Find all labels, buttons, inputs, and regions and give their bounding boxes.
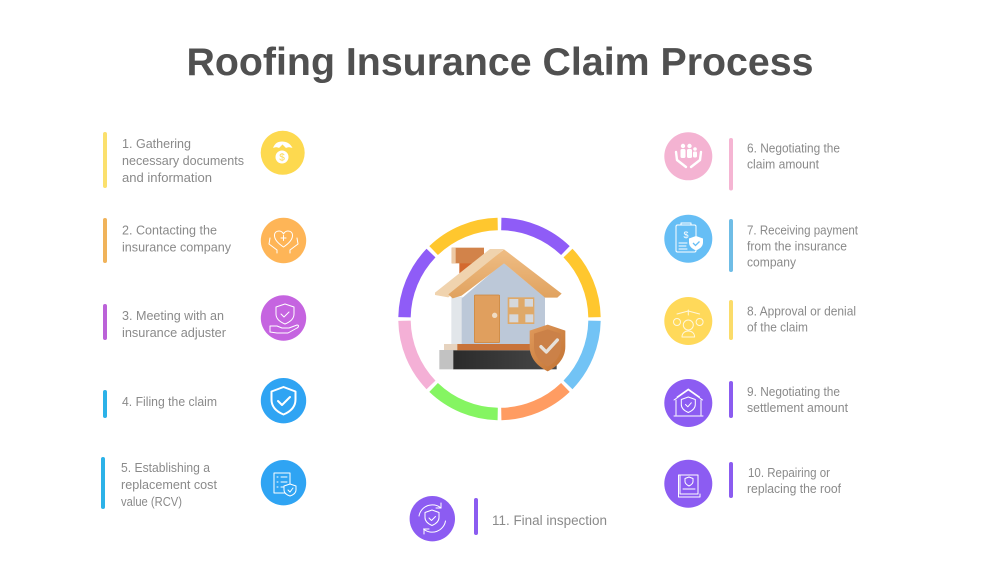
text: and information bbox=[122, 170, 212, 185]
step 1 bbox=[103, 131, 305, 188]
bar bbox=[103, 390, 107, 418]
icon: shield on hand bbox=[261, 295, 306, 341]
bar bbox=[729, 462, 733, 498]
step 11 bbox=[410, 496, 607, 541]
icon: house with shield bbox=[435, 248, 565, 371]
step 2 bbox=[103, 218, 306, 263]
text: 10. Repairing or bbox=[748, 465, 831, 480]
icon: money: $ bbox=[279, 152, 285, 164]
text bbox=[747, 222, 858, 270]
step 4 bbox=[103, 378, 306, 423]
icon: hands with heart bbox=[261, 218, 306, 263]
step 6 bbox=[664, 132, 840, 190]
text bbox=[122, 308, 227, 340]
bar bbox=[101, 457, 105, 509]
text: from the insurance bbox=[747, 238, 847, 254]
icon: shield check bbox=[261, 378, 306, 423]
text: necessary documents bbox=[122, 153, 244, 168]
bar bbox=[729, 219, 733, 272]
text bbox=[747, 384, 848, 415]
step 7 bbox=[664, 215, 858, 272]
text: 2. Contacting the bbox=[122, 222, 217, 238]
text: 9. Negotiating the bbox=[747, 384, 840, 399]
icon: policy document bbox=[664, 460, 712, 508]
step 10 bbox=[664, 460, 841, 508]
text: 7. Receiving payment bbox=[747, 222, 858, 238]
text: 4. Filing the claim bbox=[122, 394, 217, 409]
text: 5. Establishing a bbox=[121, 460, 211, 475]
bar bbox=[729, 138, 733, 190]
text bbox=[747, 304, 856, 334]
text: 6. Negotiating the bbox=[747, 140, 840, 156]
step 8 bbox=[664, 297, 856, 345]
text: insurance company bbox=[122, 240, 231, 254]
icon: shield with refresh arrows bbox=[410, 496, 455, 541]
bar bbox=[729, 381, 733, 418]
text: value (RCV) bbox=[121, 494, 182, 509]
text bbox=[122, 222, 231, 254]
bar bbox=[103, 304, 107, 340]
text bbox=[747, 465, 841, 496]
text: insurance adjuster bbox=[122, 325, 227, 340]
icon: house with shield bbox=[664, 379, 712, 427]
icon: scales with person bbox=[664, 297, 712, 345]
text bbox=[121, 460, 217, 509]
icon: money bbox=[261, 131, 305, 175]
icon: hands with family bbox=[664, 132, 712, 180]
text: 3. Meeting with an bbox=[122, 308, 224, 323]
text: 8. Approval or denial bbox=[747, 304, 856, 318]
text: 1. Gathering bbox=[122, 136, 191, 151]
icon: clipboard with shield bbox=[664, 215, 712, 263]
text bbox=[122, 136, 244, 185]
text: settlement amount bbox=[747, 400, 848, 415]
bar bbox=[103, 132, 107, 188]
text: replacing the roof bbox=[747, 481, 841, 496]
text: of the claim bbox=[747, 320, 808, 334]
icon: checklist with shield bbox=[261, 460, 306, 505]
text: replacement cost bbox=[121, 477, 217, 492]
icon: clipboard with shield: $ bbox=[683, 230, 689, 240]
step 9 bbox=[664, 379, 848, 427]
ring: eight coloured segments bbox=[404, 224, 594, 414]
text bbox=[747, 140, 840, 172]
step 5 bbox=[101, 457, 306, 509]
text: 11. Final inspection bbox=[492, 513, 607, 528]
text: company bbox=[747, 254, 796, 270]
text: claim amount bbox=[747, 156, 819, 172]
bar bbox=[103, 218, 107, 263]
title: Roofing Insurance Claim Process bbox=[186, 41, 814, 84]
step 3 bbox=[103, 295, 306, 341]
bar bbox=[729, 300, 733, 340]
bar bbox=[474, 498, 478, 535]
